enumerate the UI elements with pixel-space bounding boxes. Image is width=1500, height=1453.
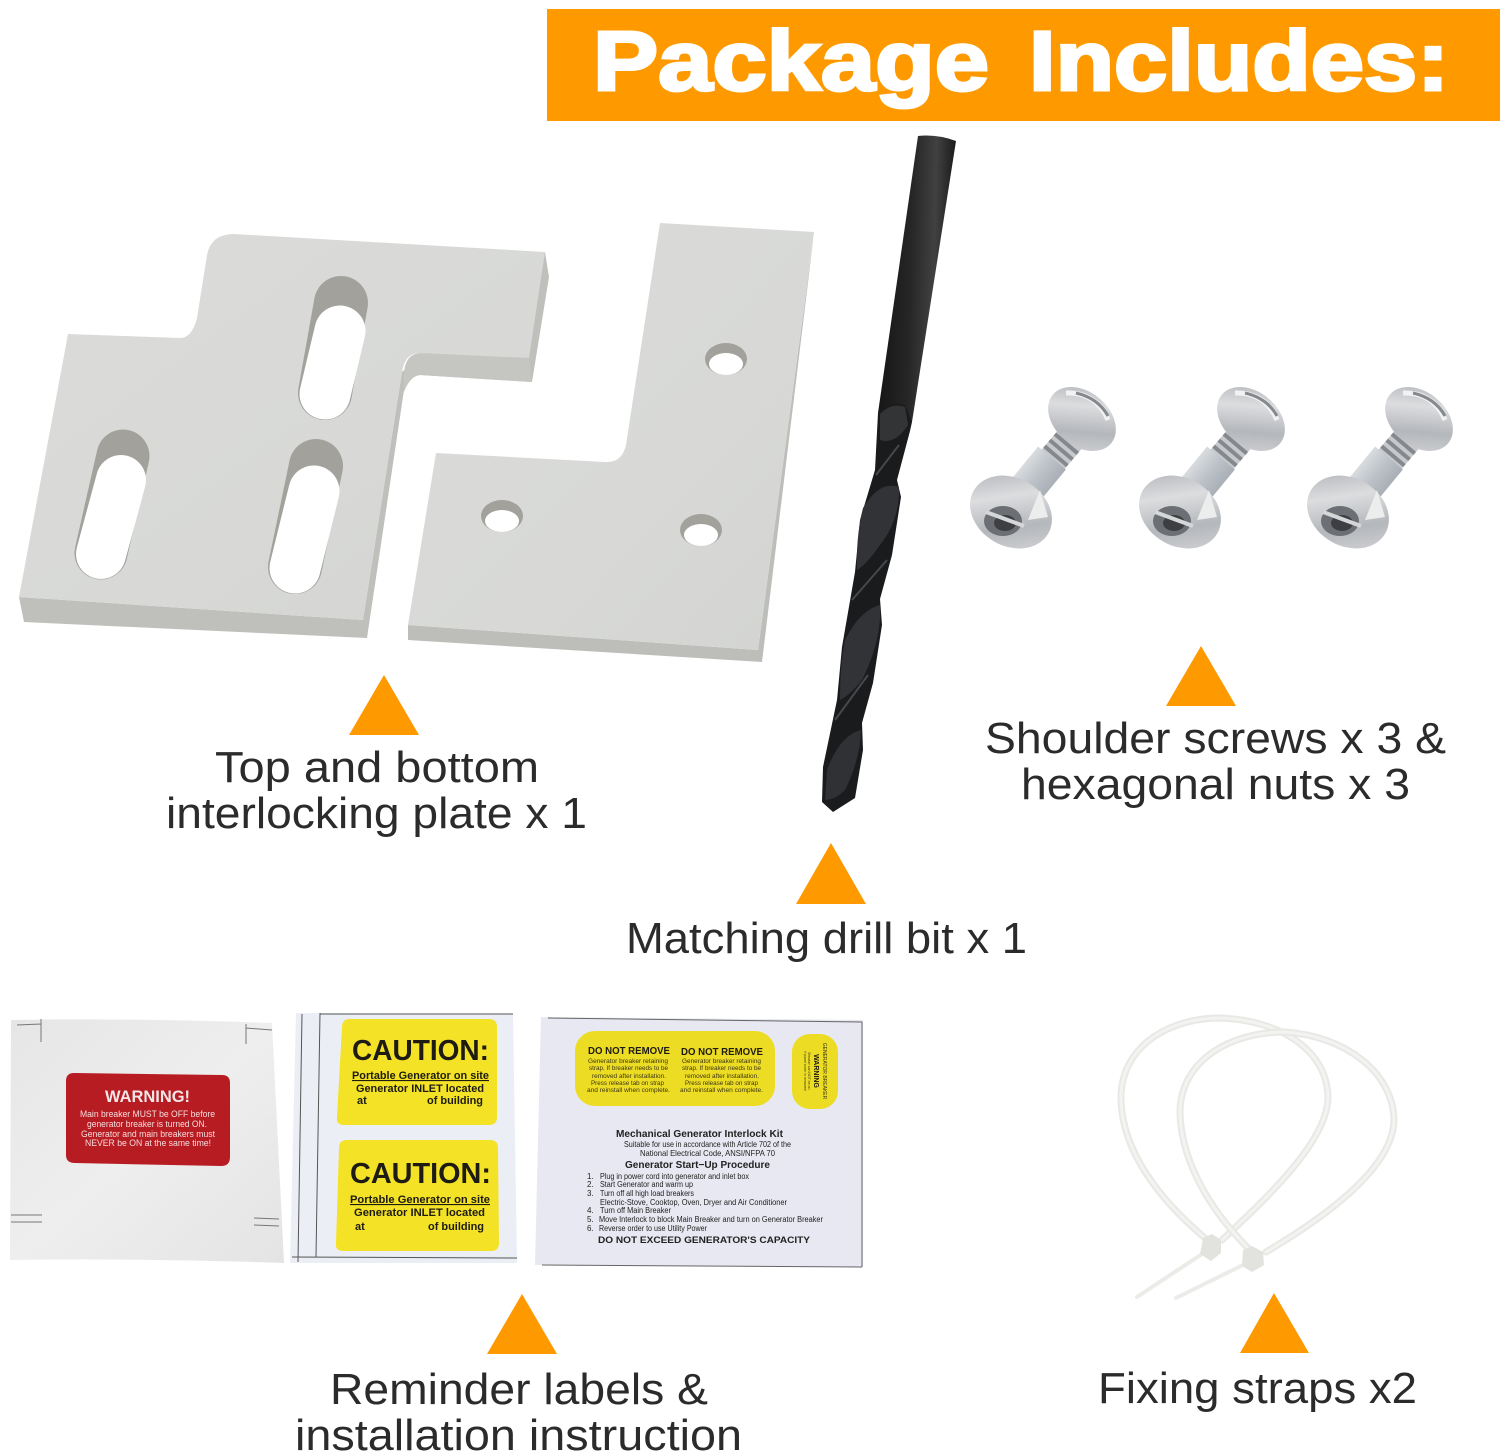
warning sticker: WARNING! — [105, 1087, 190, 1106]
instruction text: Plug in power cord into generator and inlet box — [600, 1172, 749, 1181]
warning sticker: NEVER be ON at the same time! — [85, 1138, 211, 1148]
generator breaker warning sticker: Breaker can NOT be on — [807, 1053, 811, 1089]
generator breaker warning sticker: if panel cover is removed — [803, 1052, 807, 1090]
label: reminder labels — [295, 1365, 742, 1453]
banner: Package Includes — [547, 9, 1500, 121]
generator breaker warning sticker: WARNING — [812, 1054, 819, 1088]
instruction text: Generator Start−Up Procedure — [625, 1160, 770, 1171]
caution sticker 1: of building — [427, 1095, 483, 1107]
icon: shoulder screw 3 — [1294, 374, 1465, 563]
do not remove sticker — [575, 1031, 775, 1106]
instruction text: 4. — [587, 1206, 594, 1215]
instruction text: 2. — [587, 1180, 594, 1189]
warning sticker: generator breaker is turned ON. — [87, 1119, 207, 1129]
label: screws: hexagonal nuts x 3 — [1021, 760, 1410, 809]
icon: cable tie 1 — [1121, 1018, 1328, 1297]
generator breaker warning sticker — [792, 1034, 838, 1109]
arrow: labels — [487, 1294, 557, 1354]
icon: top interlocking plate with slots — [19, 234, 549, 638]
title: Package — [593, 14, 989, 108]
icon: drill bit — [822, 136, 956, 812]
hole: upper right — [705, 343, 747, 375]
warning sticker — [66, 1073, 230, 1166]
caution sticker 2: Generator INLET located — [354, 1207, 485, 1219]
caution sticker 1: Generator INLET located — [356, 1083, 484, 1095]
caution sticker 2: at — [355, 1221, 365, 1233]
instruction text: Mechanical Generator Interlock Kit — [616, 1129, 784, 1140]
label: screws: Shoulder screws x 3 & — [985, 714, 1446, 763]
instruction text: 3. — [587, 1189, 594, 1198]
arrow: straps — [1240, 1293, 1309, 1353]
panel: warning label sheet — [10, 1019, 284, 1263]
slot: upper — [325, 303, 341, 394]
label: reminder labels: Reminder labels & — [330, 1365, 708, 1414]
label: screws — [985, 714, 1446, 809]
do not remove sticker: removed after installation. — [685, 1073, 759, 1080]
caution sticker 2: CAUTION: — [350, 1158, 491, 1190]
instruction text — [587, 1129, 823, 1246]
do not remove sticker: and reinstall when complete. — [680, 1087, 763, 1094]
do not remove sticker: DO NOT REMOVE — [681, 1047, 763, 1058]
hole: lower right — [680, 514, 722, 546]
icon: cable tie 2 — [1176, 1032, 1394, 1298]
generator breaker warning sticker: GENERATOR BREAKER — [821, 1043, 827, 1100]
icon: shoulder screw 2 — [1126, 374, 1297, 563]
panel: caution label sheet — [290, 1013, 517, 1263]
instruction text: 5. — [587, 1215, 594, 1224]
hole: lower left — [481, 500, 523, 532]
instruction text: Start Generator and warm up — [600, 1180, 693, 1189]
label: plates — [166, 743, 587, 838]
instruction text: 6. — [587, 1224, 594, 1233]
instruction text: Turn off Main Breaker — [600, 1206, 671, 1215]
icon: shoulder screw 1 — [957, 374, 1128, 563]
do not remove sticker: DO NOT REMOVE — [588, 1046, 670, 1057]
warning sticker: Generator and main breakers must — [81, 1129, 215, 1139]
slot: lower middle — [295, 466, 316, 568]
arrow: plates — [349, 675, 419, 735]
do not remove sticker: Generator breaker retaining — [588, 1058, 668, 1065]
instruction text: National Electrical Code, ANSI/NFPA 70 — [640, 1148, 775, 1158]
do not remove sticker: strap. If breaker needs to be — [589, 1065, 668, 1072]
label: straps: Fixing straps x2 — [1098, 1364, 1417, 1413]
instruction text: Turn off all high load breakers — [600, 1189, 694, 1198]
instruction text: Electric-Stove, Cooktop, Oven, Dryer and Air Conditioner — [600, 1198, 787, 1207]
label: drill bit: Matching drill bit x 1 — [626, 914, 1027, 963]
caution sticker 1: at — [357, 1095, 367, 1107]
caution sticker 1: Portable Generator on site — [352, 1070, 489, 1082]
caution sticker 1 — [337, 1019, 497, 1125]
do not remove sticker: Press release tab on strap — [685, 1080, 758, 1087]
icon: bottom interlocking plate with holes — [408, 223, 814, 662]
do not remove sticker: removed after installation. — [592, 1073, 666, 1080]
caution sticker 2: Portable Generator on site — [350, 1194, 490, 1206]
instruction text: Reverse order to use Utility Power — [599, 1224, 707, 1233]
instruction text: Suitable for use in accordance with Article 702 of the — [624, 1139, 791, 1149]
do not remove sticker: Generator breaker retaining — [682, 1058, 761, 1065]
label: plates: interlocking plate x 1 — [166, 789, 587, 838]
caution sticker 1: CAUTION: — [352, 1035, 489, 1067]
arrow: drill bit — [796, 843, 866, 904]
do not remove sticker: and reinstall when complete. — [587, 1087, 670, 1094]
title — [593, 14, 1449, 108]
label: plates: Top and bottom — [215, 743, 539, 792]
caution sticker 2: of building — [428, 1221, 484, 1233]
arrow: screws — [1166, 646, 1236, 706]
warning sticker: Main breaker MUST be OFF before — [80, 1109, 215, 1119]
caution sticker 2 — [336, 1140, 499, 1251]
instruction text: DO NOT EXCEED GENERATOR'S CAPACITY — [598, 1235, 811, 1246]
panel: instruction sheet — [535, 1017, 863, 1267]
title: Includes: — [1029, 14, 1449, 108]
do not remove sticker: Press release tab on strap — [591, 1080, 664, 1087]
instruction text: 1. — [587, 1172, 594, 1181]
instruction text: Move Interlock to block Main Breaker and turn on Generator Breaker — [599, 1215, 823, 1224]
slot: lower left — [101, 456, 123, 554]
do not remove sticker: strap. If breaker needs to be — [682, 1065, 761, 1072]
